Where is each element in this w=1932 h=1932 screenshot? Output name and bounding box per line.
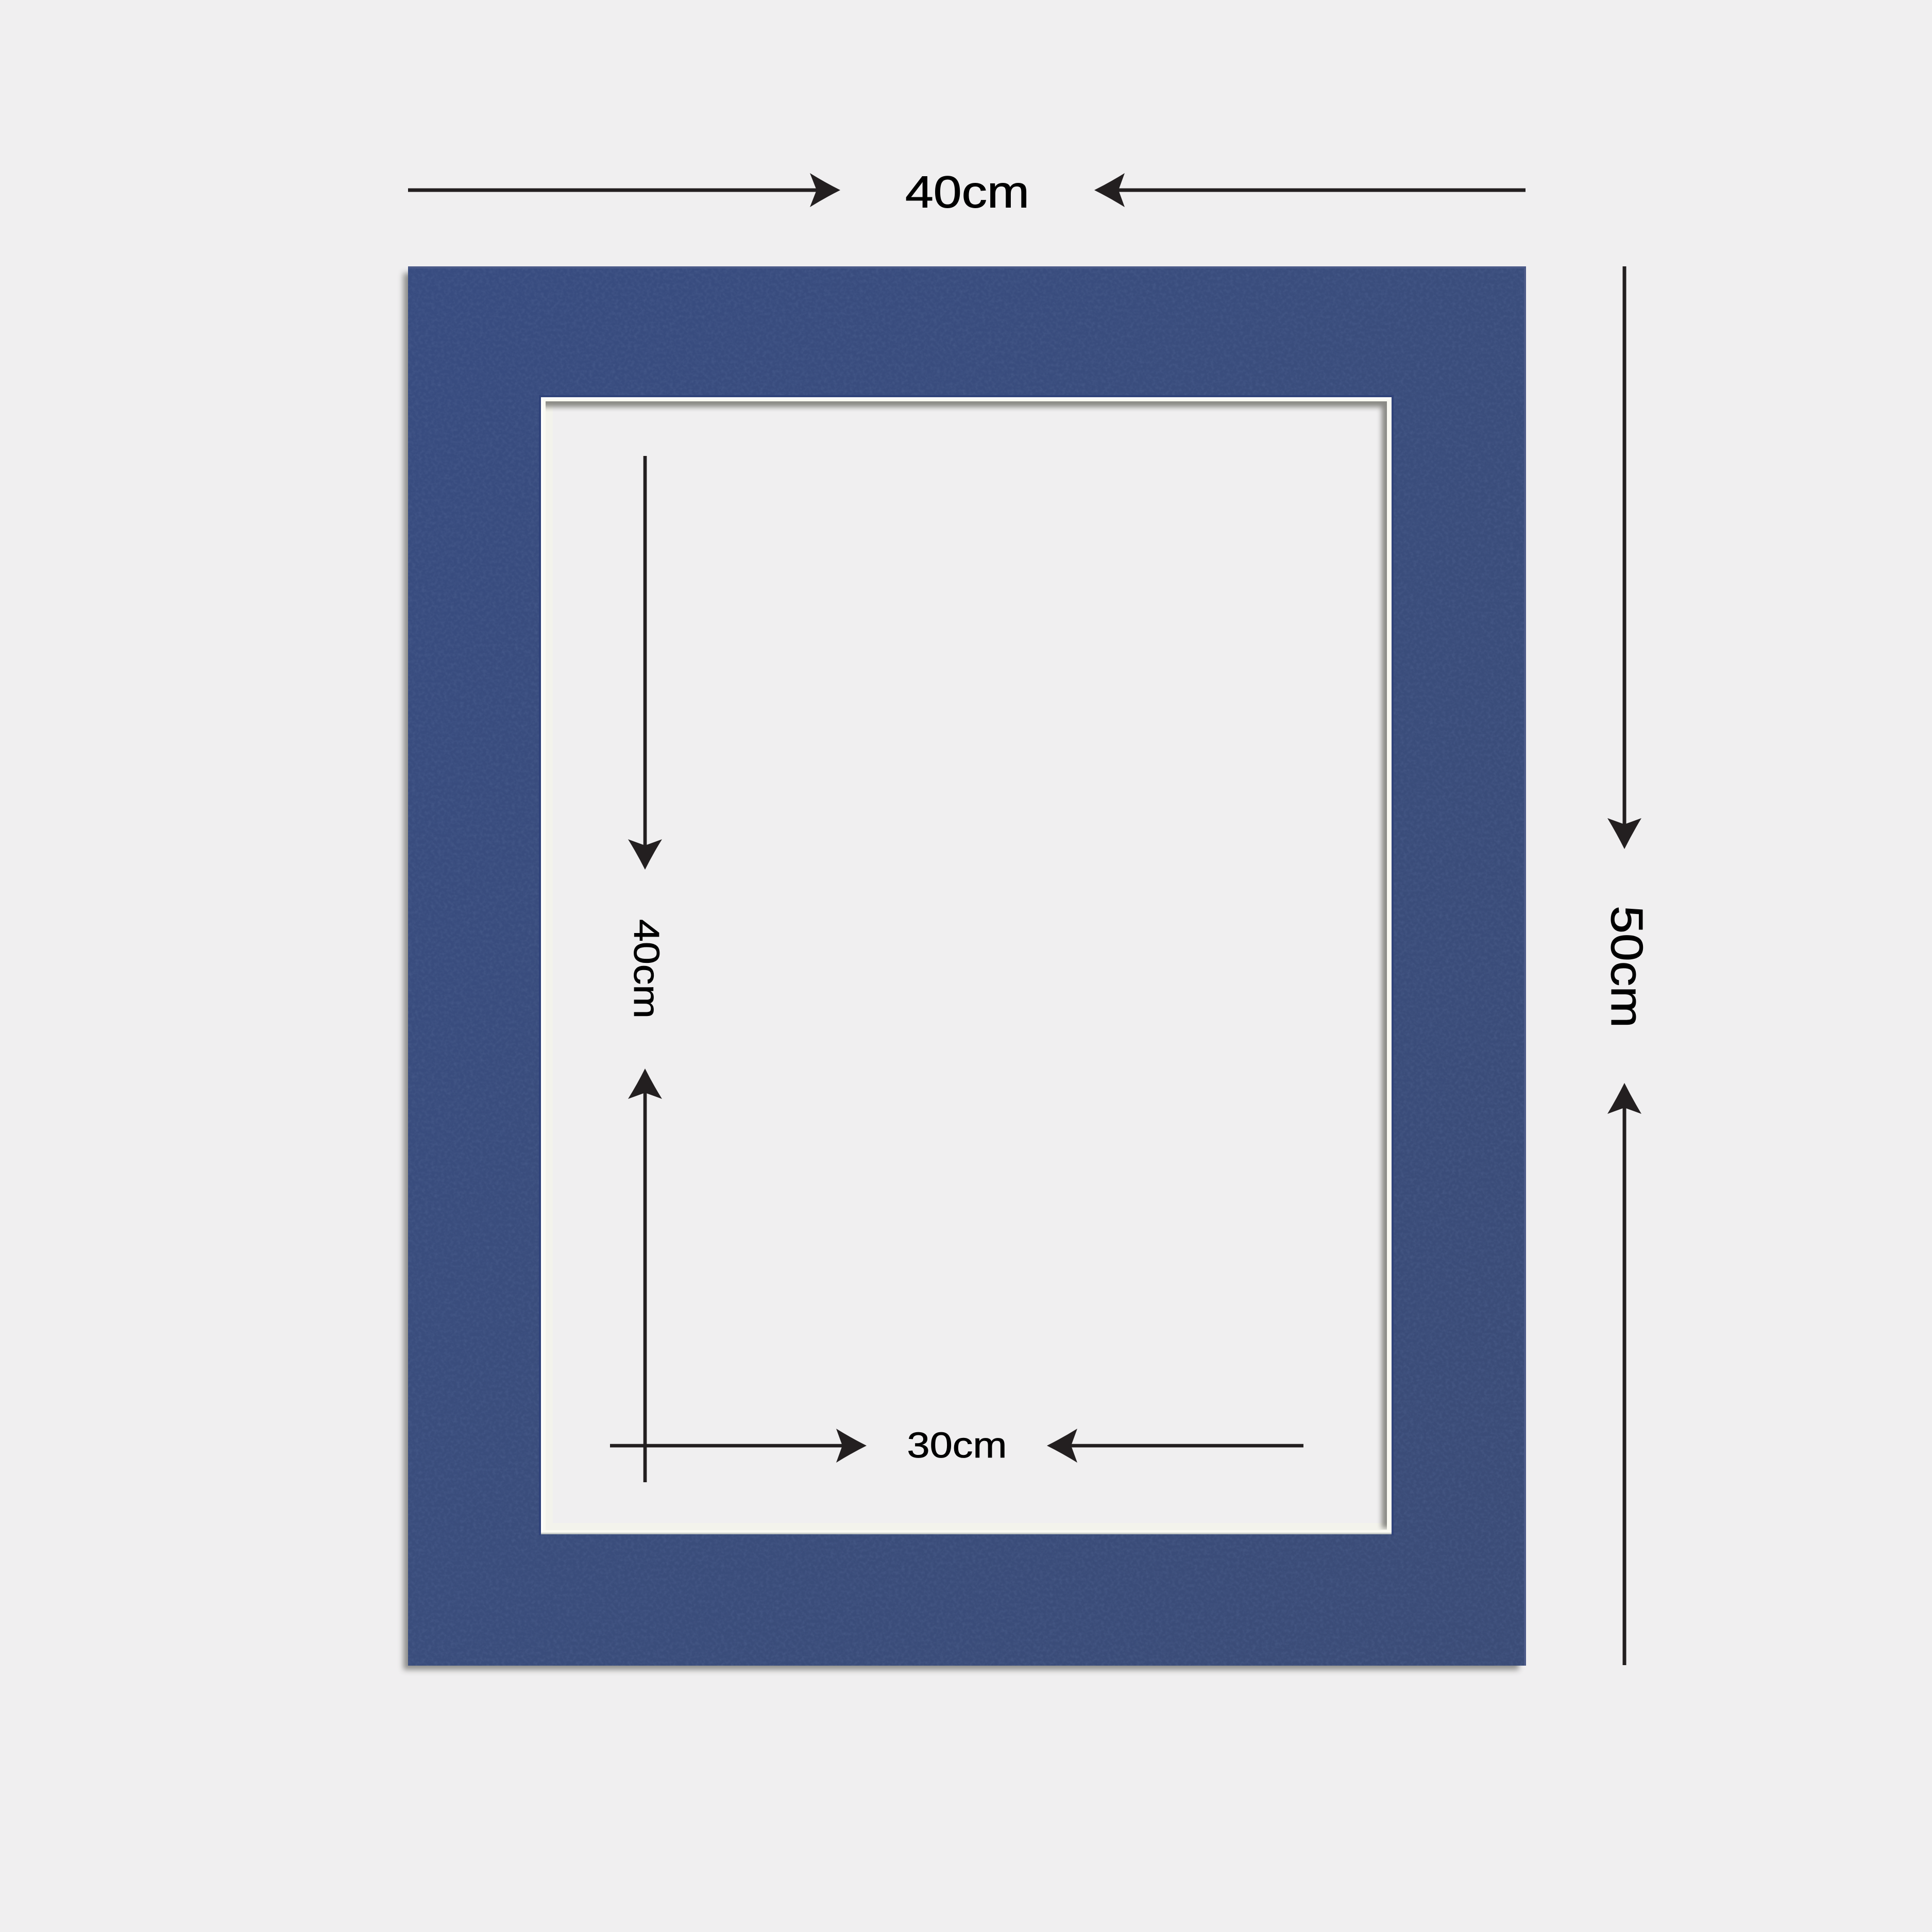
opening bevel lower edge bbox=[541, 1533, 1392, 1534]
arrow: pointing up bbox=[628, 1069, 662, 1482]
board light edge bbox=[408, 267, 1525, 1666]
opening backing bbox=[541, 397, 1392, 1534]
dimension: opening height 40cm bbox=[626, 456, 667, 1482]
arrow: pointing left bbox=[1047, 1429, 1303, 1463]
dimension: opening width 30cm bbox=[610, 1425, 1303, 1465]
board surface bbox=[408, 266, 1526, 1666]
panel: blue mount board with opening bbox=[403, 266, 1526, 1670]
opening dark cut edge bbox=[540, 396, 1393, 1535]
arrow: pointing up bbox=[1607, 1083, 1641, 1665]
paper texture bbox=[408, 266, 1526, 1666]
label: 40cm: 40cm bbox=[905, 167, 1029, 217]
label: 30cm: 30cm bbox=[907, 1425, 1007, 1465]
arrow: pointing right bbox=[408, 173, 840, 207]
opening interior bbox=[546, 401, 1387, 1530]
arrow: pointing down bbox=[628, 456, 662, 870]
opening inner shadow bbox=[536, 397, 1392, 1528]
arrow: pointing left bbox=[1094, 173, 1526, 207]
arrow: pointing down bbox=[1607, 266, 1641, 849]
opening bevel highlight bbox=[542, 398, 1391, 1534]
board drop shadow bbox=[403, 273, 1519, 1670]
opening soft cream inner glow bbox=[546, 401, 1387, 1530]
label: 40cm: 40cm bbox=[626, 919, 667, 1019]
label: 50cm: 50cm bbox=[1602, 906, 1652, 1028]
dimension: outer height 50cm bbox=[1602, 266, 1652, 1665]
dimension: outer width 40cm bbox=[408, 167, 1526, 217]
arrow: pointing right bbox=[610, 1429, 867, 1463]
